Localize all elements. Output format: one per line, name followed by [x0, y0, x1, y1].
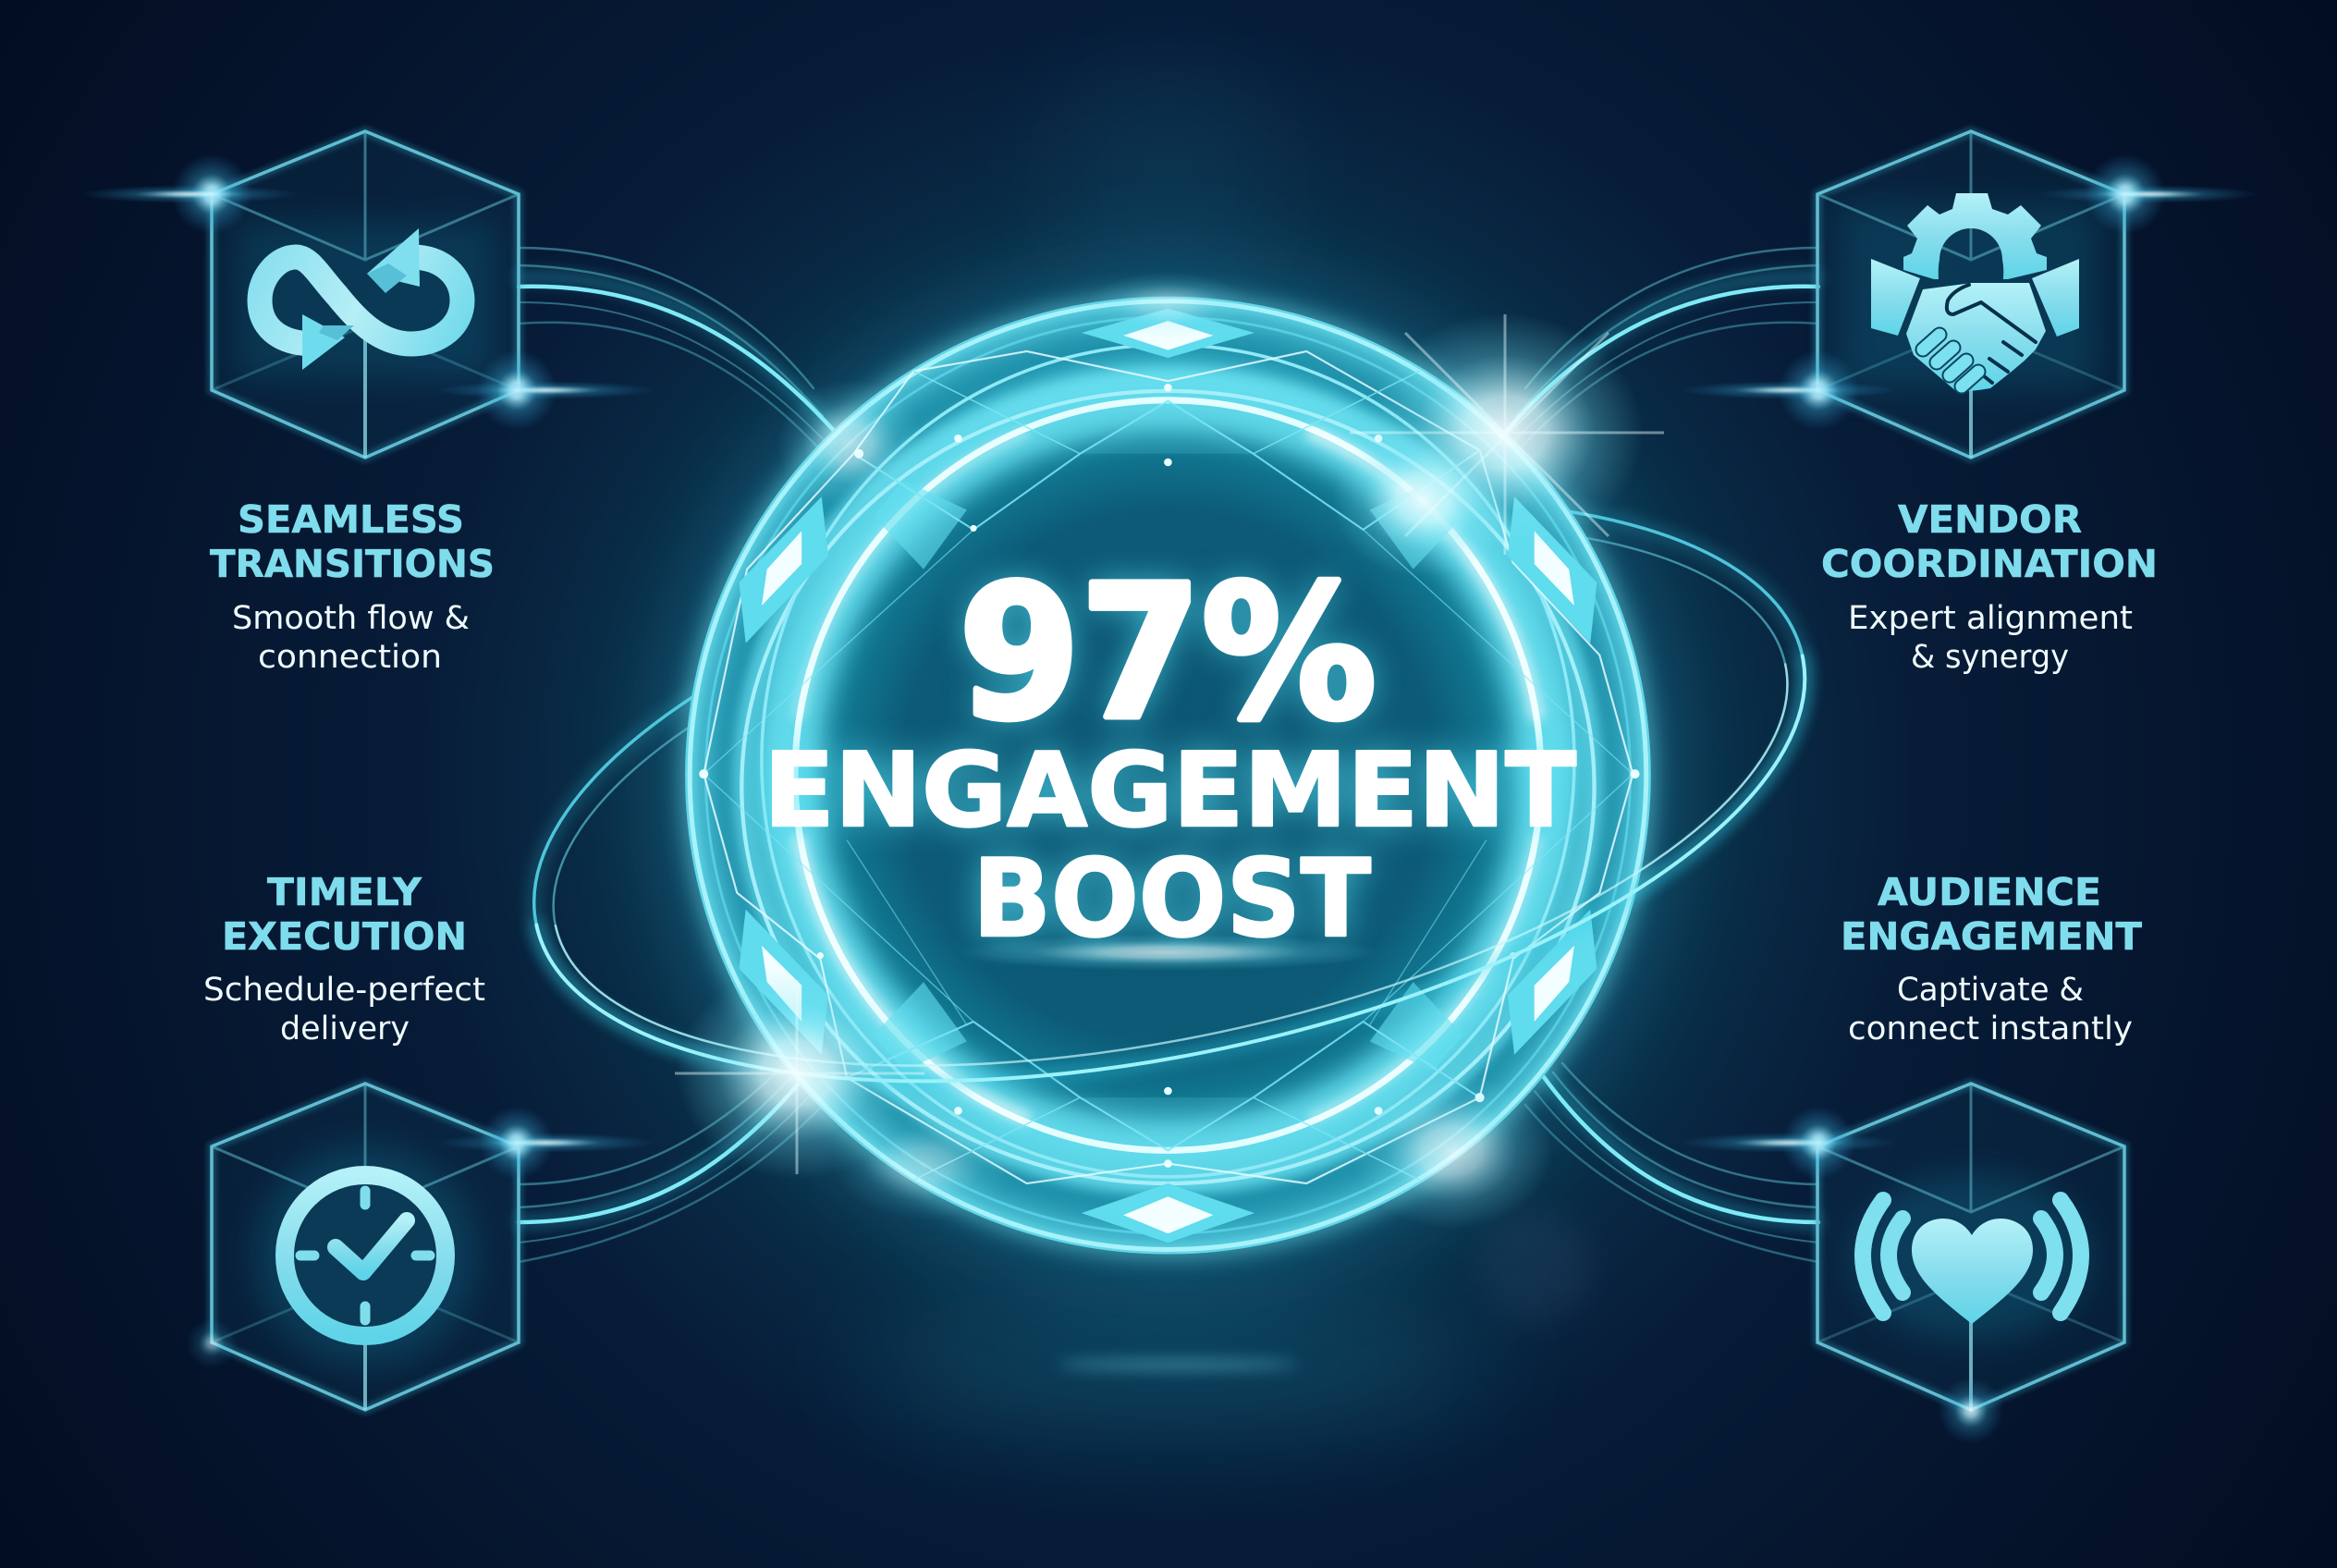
- icon: gear and handshake: [1871, 193, 2079, 392]
- diamond: upper left: [739, 496, 828, 643]
- label: audience engagement: [1841, 870, 2142, 1047]
- label: seamless transitions: Smooth flow &: [232, 600, 470, 637]
- sphere facets: [874, 401, 1463, 1150]
- gear: [1903, 193, 2047, 279]
- sphere glow rings: [690, 301, 1646, 1249]
- cube corner flares: [79, 153, 2260, 1444]
- headline word one: ENGAGEMENT: [764, 731, 1576, 851]
- icon: heart with signal arcs: [1863, 1200, 2081, 1324]
- label: vendor coordination: COORDINATION: [1821, 542, 2158, 586]
- label: seamless transitions: SEAMLESS: [238, 497, 464, 542]
- connector: seamless transitions to sphere: [519, 248, 842, 462]
- label: vendor coordination: [1821, 497, 2158, 676]
- headline: 97% engagement boost: 97%: [959, 545, 1377, 760]
- diamond: bottom: [1082, 1183, 1254, 1243]
- background glows: [678, 65, 1658, 1410]
- headline number: 97%: [959, 545, 1377, 760]
- sphere nodes: [699, 384, 1640, 1168]
- diamond: lower left: [739, 910, 828, 1055]
- orbit ring front arc: [536, 655, 1857, 1182]
- connector: vendor coordination to sphere: [1502, 248, 1818, 462]
- central sphere: [685, 297, 1651, 1254]
- diamond: upper right: [1508, 496, 1597, 643]
- diamond: top: [1082, 309, 1254, 358]
- cube: seamless transitions: [212, 131, 519, 458]
- headline: 97% engagement boost: [764, 545, 1576, 962]
- headline: 97% engagement boost: ENGAGEMENT: [764, 731, 1576, 851]
- diamond: lower right: [1508, 910, 1597, 1055]
- left cuff: [1871, 259, 1920, 336]
- label: vendor coordination: VENDOR: [1898, 497, 2082, 542]
- connector: timely execution to sphere: [519, 1063, 823, 1262]
- headline word two: BOOST: [973, 837, 1371, 962]
- label: timely execution: EXECUTION: [222, 914, 467, 959]
- label: vendor coordination: Expert alignment: [1848, 600, 2133, 637]
- light flares on sphere: [675, 272, 1664, 1230]
- cube: timely execution: [212, 1084, 519, 1410]
- icon: clock with check: [285, 1175, 446, 1336]
- sphere body: [685, 297, 1651, 1254]
- cube: vendor coordination: [1817, 131, 2124, 458]
- orbit ring behind sphere: [482, 398, 1857, 1182]
- label: timely execution: TIMELY: [267, 870, 422, 914]
- label: timely execution: delivery: [280, 1011, 410, 1047]
- label: vendor coordination: & synergy: [1911, 639, 2069, 676]
- label: timely execution: Schedule-perfect: [203, 972, 485, 1009]
- lattice lines: [704, 351, 1633, 1183]
- label: audience engagement: ENGAGEMENT: [1841, 914, 2142, 959]
- connector: audience engagement to sphere: [1525, 1063, 1818, 1262]
- label: seamless transitions: [210, 497, 495, 676]
- label: audience engagement: Captivate &: [1897, 972, 2084, 1009]
- headline: 97% engagement boost: BOOST: [973, 837, 1371, 962]
- cube: audience engagement: [1817, 1084, 2124, 1410]
- label: seamless transitions: connection: [258, 639, 442, 676]
- right cuff: [2032, 259, 2079, 337]
- bright arcs: [799, 434, 1536, 1118]
- label: audience engagement: connect instantly: [1848, 1011, 2133, 1047]
- label: timely execution: [203, 870, 485, 1047]
- clasped hands: [1906, 283, 2046, 392]
- icon: infinity loop arrows: [260, 228, 462, 370]
- label: audience engagement: AUDIENCE: [1878, 870, 2101, 914]
- label: seamless transitions: TRANSITIONS: [210, 542, 495, 586]
